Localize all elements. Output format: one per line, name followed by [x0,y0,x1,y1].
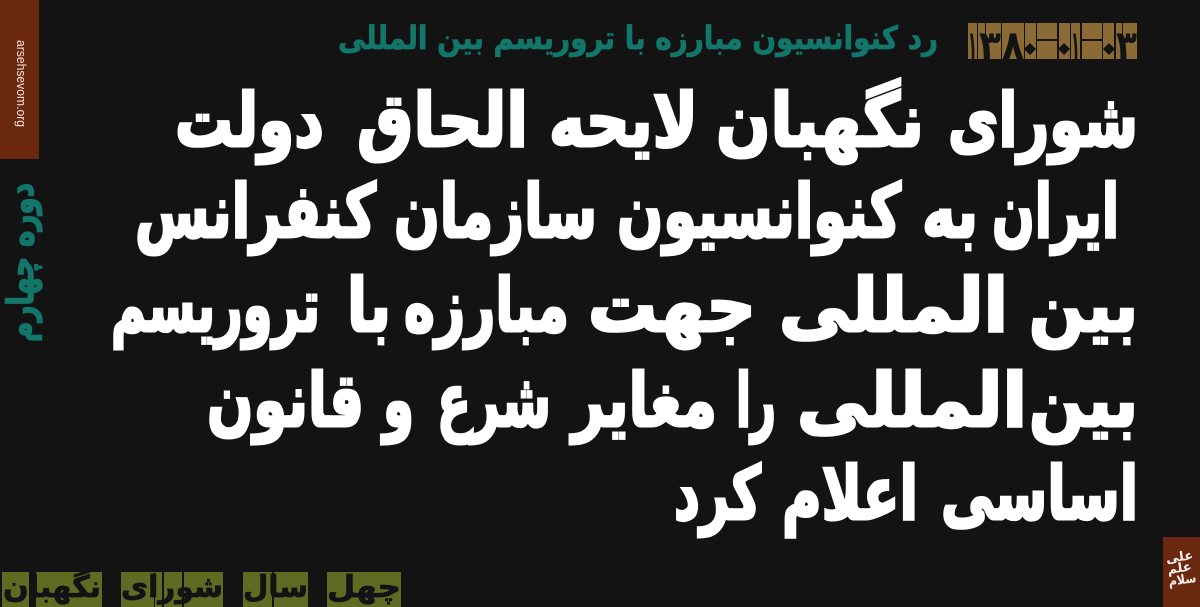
headline line 1: شورای [948,78,1138,165]
date badge: ۳ [1116,23,1137,69]
headline [111,78,1138,537]
headline line 3: بین [1029,263,1138,349]
headline line 5: اعلام [782,451,918,537]
headline line 1 [175,78,1138,165]
footer badge: forty years of the Guardian Council: چهل [327,570,401,605]
footer badge: forty years of the Guardian Council: سال [243,570,308,605]
logo mark: علم [1166,560,1193,578]
headline line 1: نگهبان [716,78,924,165]
headline line 1: الحاق [357,78,528,164]
headline line 5 [674,451,1138,537]
headline line 3: جهت [588,263,756,350]
headline line 1: دولت [175,78,324,165]
date badge: ۸ [1002,23,1024,69]
headline line 3: تروریسم [111,263,320,350]
headline line 4: و [380,358,414,445]
headline line 4: را [736,358,776,444]
panel: site tab [0,0,39,159]
headline line 4: بین [1029,358,1138,444]
headline line 4: المللی [797,358,1027,444]
headline line 4: قانون [207,358,364,445]
headline line 3: مبارزه [404,263,569,349]
headline line 1: لایحه [549,78,698,164]
date badge [968,23,1137,69]
logo tab [1163,537,1200,607]
headline line 4: مغایر [569,358,717,444]
footer badge: forty years of the Guardian Council: نگهبان [3,569,101,605]
headline line 2: به [922,169,978,255]
headline line 2 [135,169,1119,256]
footer badge: forty years of the Guardian Council [2,569,401,607]
headline line 2: کنفرانس [135,169,377,255]
headline line 2: سازمان [394,169,597,255]
logo mark: علی [1165,548,1194,567]
headline line 3 [111,263,1138,350]
date badge: ۳ [979,23,1001,69]
headline line 4 [207,358,1138,445]
headline line 2: کنوانسیون [617,169,902,256]
date badge: ۱ [1071,23,1080,69]
footer badge: forty years of the Guardian Council: شورای [121,570,223,605]
logo mark [1164,548,1197,590]
headline line 3: با [347,263,391,349]
date badge: ۱ [968,23,977,69]
headline line 5: کرد [674,451,762,537]
headline line 3: المللی [779,263,1008,349]
headline line 4: شرع [437,358,551,444]
vertical label: fourth term: دوره چهارم [1,183,42,342]
site address: arsehsevom.org [14,40,29,127]
subtitle: رد کنوانسیون مبارزه با تروریسم بین المللی [338,19,938,57]
headline line 2: ایران [992,169,1119,255]
